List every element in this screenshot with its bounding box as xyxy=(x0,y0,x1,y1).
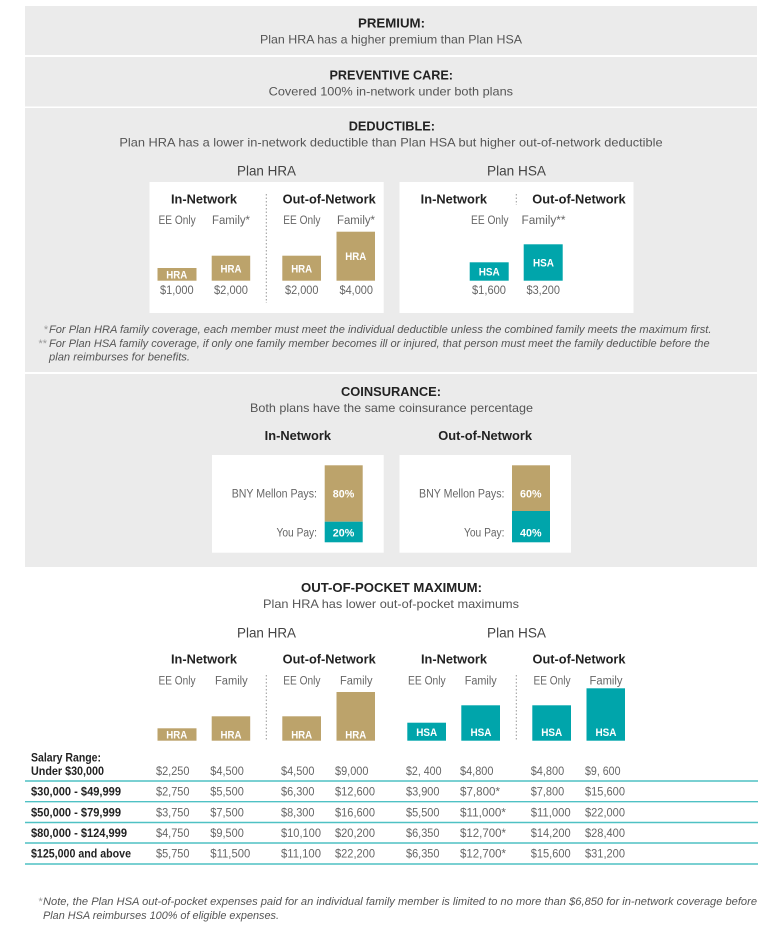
out-of-pocket chart: Plan HSA: Out-of-Network xyxy=(532,653,626,667)
out-of-pocket chart: Plan HRA: HRA xyxy=(345,730,366,742)
row: under $30,000: $2, 400 xyxy=(406,766,442,778)
out-of-pocket chart: Plan HSA: Plan HSA xyxy=(487,624,547,640)
panel: deductible: DEDUCTIBLE: xyxy=(349,118,435,133)
row: $125,000 and above: $12,700* xyxy=(460,849,507,861)
deductible chart: Plan HRA: $2,000 xyxy=(285,285,318,297)
out-of-pocket chart: Plan HRA: Family xyxy=(215,675,248,687)
out-of-pocket chart: Plan HSA xyxy=(407,624,626,741)
panel: preventive care: Covered 100% in-network under both plans xyxy=(269,84,513,98)
row: $50,000 - $79,999: $50,000 - $79,999 xyxy=(31,807,121,819)
row: $80,000 - $124,999: $10,100 xyxy=(281,828,321,840)
out-of-pocket chart: Plan HSA: HSA xyxy=(470,727,492,739)
deductible footnotes: For Plan HRA family coverage, each member must meet the individual deductible unless the combined family meets the maximum first. xyxy=(49,324,711,336)
panel: preventive care: PREVENTIVE CARE: xyxy=(330,67,453,82)
coinsurance chart: in-network: 80% xyxy=(333,489,354,501)
deductible chart: Plan HSA: $3,200 xyxy=(526,285,560,297)
heading: out-of-pocket maximum: OUT-OF-POCKET MAXIMUM: xyxy=(301,580,482,595)
row: $50,000 - $79,999: $3,750 xyxy=(156,807,190,819)
deductible chart: Plan HSA: Family** xyxy=(522,215,566,227)
out-of-pocket chart: Plan HSA: In-Network xyxy=(421,653,487,667)
coinsurance chart: in-network: You Pay: xyxy=(276,528,317,540)
deductible chart: Plan HRA: EE Only xyxy=(283,215,321,227)
out-of-pocket chart: Plan HSA: HSA xyxy=(416,727,437,739)
deductible chart: Plan HSA: Plan HSA xyxy=(487,163,547,179)
out-of-pocket chart: Plan HSA: Family xyxy=(465,675,497,687)
row: $125,000 and above: $5,750 xyxy=(156,849,190,861)
row: $30,000 - $49,999: $30,000 - $49,999 xyxy=(31,787,121,799)
coinsurance chart: out-of-network: You Pay: xyxy=(464,528,504,540)
out-of-pocket chart: Plan HRA: In-Network xyxy=(171,653,237,667)
deductible chart: Plan HSA: HSA xyxy=(533,258,554,270)
deductible footnotes xyxy=(38,324,711,364)
out-of-pocket chart: Plan HSA: EE Only xyxy=(408,675,446,687)
deductible chart: Plan HRA: $4,000 xyxy=(340,285,373,297)
row: under $30,000: $4,800 xyxy=(460,766,494,778)
panel: coinsurance: COINSURANCE: xyxy=(341,384,441,399)
deductible chart: Plan HRA: $2,000 xyxy=(214,285,248,297)
out-of-pocket footnote: Plan HSA reimburses 100% of eligible expenses. xyxy=(43,910,279,922)
row: under $30,000: $9, 600 xyxy=(585,766,620,778)
row: $80,000 - $124,999: $80,000 - $124,999 xyxy=(31,828,127,840)
row: under $30,000: Under $30,000 xyxy=(31,766,104,778)
deductible chart: Plan HRA: Out-of-Network xyxy=(283,193,376,207)
row: $30,000 - $49,999: $2,750 xyxy=(156,787,190,799)
deductible chart: Plan HRA: Plan HRA xyxy=(237,163,297,179)
row: $30,000 - $49,999: $5,500 xyxy=(210,787,244,799)
row: $80,000 - $124,999: $14,200 xyxy=(531,828,571,840)
deductible chart: Plan HRA: EE Only xyxy=(158,215,196,227)
heading: out-of-pocket maximum xyxy=(263,580,519,611)
row: $80,000 - $124,999: $9,500 xyxy=(210,828,244,840)
panel: coinsurance: Both plans have the same coinsurance percentage xyxy=(250,401,533,415)
row: under $30,000: Salary Range: xyxy=(31,752,101,764)
row: $125,000 and above: $6,350 xyxy=(406,849,440,861)
deductible chart: Plan HRA xyxy=(150,163,384,313)
panel: preventive care xyxy=(25,57,757,106)
deductible chart: Plan HSA: Out-of-Network xyxy=(532,193,626,207)
row: under $30,000: $4,500 xyxy=(281,766,314,778)
deductible chart: Plan HSA: In-Network xyxy=(421,193,487,207)
deductible chart: Plan HRA: Family* xyxy=(212,215,251,227)
deductible footnotes: plan reimburses for benefits. xyxy=(48,352,190,364)
row: $30,000 - $49,999 xyxy=(31,787,625,799)
deductible chart: Plan HSA: EE Only xyxy=(471,215,509,227)
row: $30,000 - $49,999: $6,300 xyxy=(281,787,314,799)
row: under $30,000: $2,250 xyxy=(156,766,190,778)
row: $30,000 - $49,999: $7,800 xyxy=(531,787,564,799)
deductible chart: Plan HRA: $1,000 xyxy=(160,285,194,297)
coinsurance chart: out-of-network: BNY Mellon Pays: xyxy=(419,489,504,501)
panel: premium xyxy=(25,6,757,55)
out-of-pocket chart: Plan HRA: Out-of-Network xyxy=(283,653,376,667)
out-of-pocket chart: Plan HSA: HSA xyxy=(541,727,562,739)
deductible footnotes: * xyxy=(43,324,48,336)
coinsurance chart: out-of-network: 40% xyxy=(520,528,542,540)
row: $125,000 and above: $22,200 xyxy=(335,849,375,861)
out-of-pocket chart: Plan HRA: EE Only xyxy=(283,675,321,687)
row: $50,000 - $79,999: $22,000 xyxy=(585,807,625,819)
panel: premium: Plan HRA has a higher premium than Plan HSA xyxy=(260,33,522,47)
coinsurance chart: in-network: BNY Mellon Pays: xyxy=(232,489,317,501)
row: $30,000 - $49,999: $15,600 xyxy=(585,787,625,799)
deductible footnotes: ** xyxy=(38,338,47,350)
row: $125,000 and above: $15,600 xyxy=(531,849,571,861)
row: under $30,000: $4,800 xyxy=(531,766,564,778)
row: $125,000 and above: $11,100 xyxy=(281,849,321,861)
out-of-pocket chart: Plan HRA: EE Only xyxy=(158,675,196,687)
row: $80,000 - $124,999: $12,700* xyxy=(460,828,507,840)
row: $125,000 and above xyxy=(31,849,625,861)
out-of-pocket chart: Plan HRA xyxy=(158,624,376,742)
out-of-pocket chart: Plan HRA: Plan HRA xyxy=(237,624,297,640)
row: $50,000 - $79,999: $16,600 xyxy=(335,807,375,819)
row: $50,000 - $79,999: $5,500 xyxy=(406,807,440,819)
out-of-pocket chart: Plan HSA: Family xyxy=(590,675,623,687)
row: $30,000 - $49,999: $12,600 xyxy=(335,787,375,799)
row: under $30,000: $4,500 xyxy=(210,766,244,778)
deductible chart: Plan HRA: HRA xyxy=(220,264,242,276)
coinsurance chart: out-of-network: Out-of-Network xyxy=(438,429,532,443)
deductible chart: Plan HSA: HSA xyxy=(479,267,500,279)
coinsurance chart: out-of-network: 60% xyxy=(520,489,542,501)
salary range table xyxy=(25,752,758,864)
deductible footnotes: For Plan HSA family coverage, if only one family member becomes ill or injured, that person must meet the family deductible before the xyxy=(49,338,710,350)
row: $80,000 - $124,999: $6,350 xyxy=(406,828,440,840)
coinsurance chart: in-network: In-Network xyxy=(265,429,331,443)
deductible chart: Plan HRA: HRA xyxy=(291,264,312,276)
row: $50,000 - $79,999: $11,000* xyxy=(460,807,507,819)
panel: coinsurance xyxy=(25,374,757,567)
row: $125,000 and above: $31,200 xyxy=(585,849,625,861)
out-of-pocket chart: Plan HRA: HRA xyxy=(166,730,187,742)
heading: out-of-pocket maximum: Plan HRA has lower out-of-pocket maximums xyxy=(263,597,519,611)
row: $50,000 - $79,999: $11,000 xyxy=(531,807,571,819)
panel: deductible: Plan HRA has a lower in-network deductible than Plan HSA but higher out-of-network deductible xyxy=(119,136,663,150)
row: $125,000 and above: $11,500 xyxy=(210,849,250,861)
out-of-pocket footnote: Note, the Plan HSA out-of-pocket expenses paid for an individual family member is limited to no more than $6,850 for in-network coverage before xyxy=(43,896,757,908)
row: $30,000 - $49,999: $3,900 xyxy=(406,787,440,799)
row: $80,000 - $124,999: $4,750 xyxy=(156,828,190,840)
row: under $30,000 xyxy=(31,752,620,778)
row: $80,000 - $124,999: $20,200 xyxy=(335,828,375,840)
panel: deductible xyxy=(25,108,757,372)
coinsurance chart: in-network: 20% xyxy=(333,528,354,540)
row: under $30,000: $9,000 xyxy=(335,766,368,778)
deductible chart: Plan HSA xyxy=(400,163,634,313)
row: $125,000 and above: $125,000 and above xyxy=(31,849,131,861)
coinsurance chart: out-of-network xyxy=(400,429,571,553)
out-of-pocket footnote xyxy=(38,896,757,922)
out-of-pocket chart: Plan HRA: HRA xyxy=(220,730,242,742)
coinsurance chart: in-network xyxy=(212,429,384,553)
out-of-pocket chart: Plan HRA: Family xyxy=(340,675,373,687)
row: $30,000 - $49,999: $7,800* xyxy=(460,787,501,799)
row: $50,000 - $79,999 xyxy=(31,807,625,819)
out-of-pocket chart: Plan HSA: EE Only xyxy=(534,675,571,687)
row: $50,000 - $79,999: $7,500 xyxy=(210,807,244,819)
out-of-pocket footnote: * xyxy=(38,896,43,908)
deductible chart: Plan HSA: $1,600 xyxy=(472,285,506,297)
row: $80,000 - $124,999: $28,400 xyxy=(585,828,625,840)
deductible chart: Plan HRA: In-Network xyxy=(171,193,237,207)
out-of-pocket chart: Plan HSA: HSA xyxy=(596,727,617,739)
deductible chart: Plan HRA: HRA xyxy=(345,251,366,263)
out-of-pocket chart: Plan HRA: HRA xyxy=(291,730,312,742)
row: $50,000 - $79,999: $8,300 xyxy=(281,807,314,819)
deductible chart: Plan HRA: HRA xyxy=(166,269,187,281)
row: $80,000 - $124,999 xyxy=(31,828,625,840)
deductible chart: Plan HRA: Family* xyxy=(337,215,376,227)
panel: premium: PREMIUM: xyxy=(358,16,425,31)
